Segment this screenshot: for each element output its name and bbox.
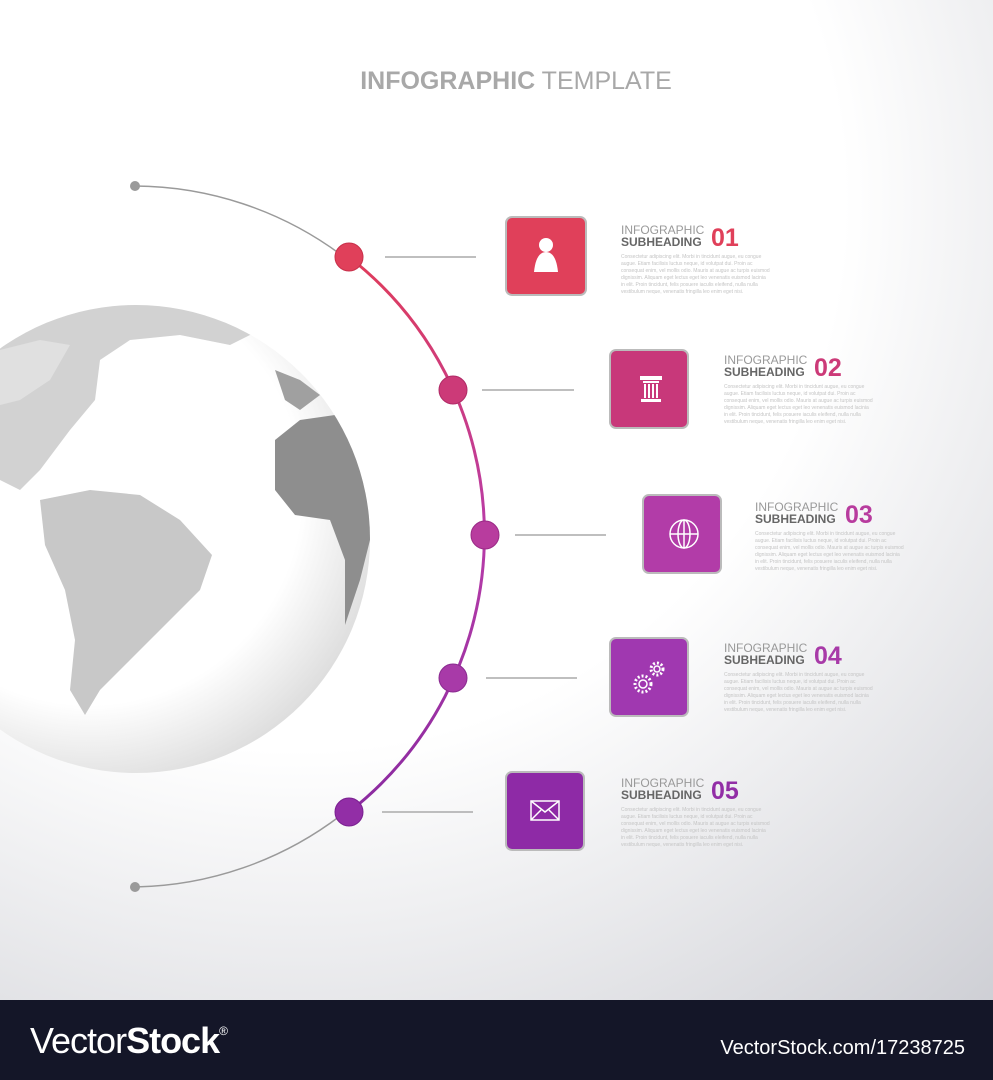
item 01: INFOGRAPHIC <box>621 223 705 237</box>
item 04: Consectetur adipiscing elit. Morbi in tincidunt augue, eu congue <box>724 672 865 678</box>
item 05: 05 <box>711 777 739 805</box>
globe <box>0 300 375 773</box>
grey timeline arc <box>135 186 340 887</box>
item 05: SUBHEADING <box>621 788 702 802</box>
item 05 <box>335 772 770 850</box>
footer bar: VectorStock.com/17238725 <box>720 1037 965 1059</box>
item 05: Consectetur adipiscing elit. Morbi in tincidunt augue, eu congue <box>621 807 762 813</box>
item 03: Consectetur adipiscing elit. Morbi in tincidunt augue, eu congue <box>755 531 896 537</box>
item 02: in elit. Proin tincidunt, felis posuere iaculis eleifend, nulla nulla <box>724 412 861 418</box>
item 01: 01 <box>711 224 739 252</box>
item 03: vestibulum neque, venenatis fringilla leo enim eget nisi. <box>755 566 877 572</box>
item 02: Consectetur adipiscing elit. Morbi in tincidunt augue, eu congue <box>724 384 865 390</box>
item 03: INFOGRAPHIC <box>755 500 839 514</box>
item 01: dignissim. Aliquam eget lectus eget leo venenatis euismod lacinia <box>621 275 766 281</box>
item 05: consequat enim, vel mollis odio. Mauris at augue ac turpis euismod <box>621 821 770 827</box>
item 04: vestibulum neque, venenatis fringilla leo enim eget nisi. <box>724 707 846 713</box>
item 04: augue. Etiam facilisis luctus neque, id volutpat dui. Proin ac <box>724 679 856 685</box>
item 02: dignissim. Aliquam eget lectus eget leo venenatis euismod lacinia <box>724 405 869 411</box>
item 05: in elit. Proin tincidunt, felis posuere iaculis eleifend, nulla nulla <box>621 835 758 841</box>
coloured timeline arc <box>349 257 484 812</box>
title: INFOGRAPHIC TEMPLATE <box>360 67 672 95</box>
footer bar: VectorStock <box>30 1020 219 1061</box>
item 04: INFOGRAPHIC <box>724 641 808 655</box>
item 03: consequat enim, vel mollis odio. Mauris at augue ac turpis euismod <box>755 545 904 551</box>
item 03: 03 <box>845 501 873 529</box>
item 05: vestibulum neque, venenatis fringilla leo enim eget nisi. <box>621 842 743 848</box>
footer bar <box>0 1000 993 1080</box>
item 03: SUBHEADING <box>755 512 836 526</box>
item 02: consequat enim, vel mollis odio. Mauris at augue ac turpis euismod <box>724 398 873 404</box>
item 03: in elit. Proin tincidunt, felis posuere iaculis eleifend, nulla nulla <box>755 559 892 565</box>
item 01: SUBHEADING <box>621 235 702 249</box>
item 04: consequat enim, vel mollis odio. Mauris at augue ac turpis euismod <box>724 686 873 692</box>
item 02: 02 <box>814 354 842 382</box>
item 01: Consectetur adipiscing elit. Morbi in tincidunt augue, eu congue <box>621 254 762 260</box>
item 04: SUBHEADING <box>724 653 805 667</box>
item 03 <box>471 495 904 573</box>
item 02 <box>439 350 873 428</box>
item 01: consequat enim, vel mollis odio. Mauris at augue ac turpis euismod <box>621 268 770 274</box>
item 04: dignissim. Aliquam eget lectus eget leo venenatis euismod lacinia <box>724 693 869 699</box>
item 01: vestibulum neque, venenatis fringilla leo enim eget nisi. <box>621 289 743 295</box>
item 04: 04 <box>814 642 842 670</box>
item 04 <box>439 638 873 716</box>
item 04: in elit. Proin tincidunt, felis posuere iaculis eleifend, nulla nulla <box>724 700 861 706</box>
item 02: augue. Etiam facilisis luctus neque, id volutpat dui. Proin ac <box>724 391 856 397</box>
item 05: INFOGRAPHIC <box>621 776 705 790</box>
item 02: INFOGRAPHIC <box>724 353 808 367</box>
item 02: vestibulum neque, venenatis fringilla leo enim eget nisi. <box>724 419 846 425</box>
item 01: augue. Etiam facilisis luctus neque, id volutpat dui. Proin ac <box>621 261 753 267</box>
item 03: dignissim. Aliquam eget lectus eget leo venenatis euismod lacinia <box>755 552 900 558</box>
item 05: dignissim. Aliquam eget lectus eget leo venenatis euismod lacinia <box>621 828 766 834</box>
item 02: SUBHEADING <box>724 365 805 379</box>
item 05: augue. Etiam facilisis luctus neque, id volutpat dui. Proin ac <box>621 814 753 820</box>
footer bar: ® <box>219 1024 228 1038</box>
item 03: augue. Etiam facilisis luctus neque, id volutpat dui. Proin ac <box>755 538 887 544</box>
item 01: in elit. Proin tincidunt, felis posuere iaculis eleifend, nulla nulla <box>621 282 758 288</box>
item 01 <box>335 217 770 295</box>
